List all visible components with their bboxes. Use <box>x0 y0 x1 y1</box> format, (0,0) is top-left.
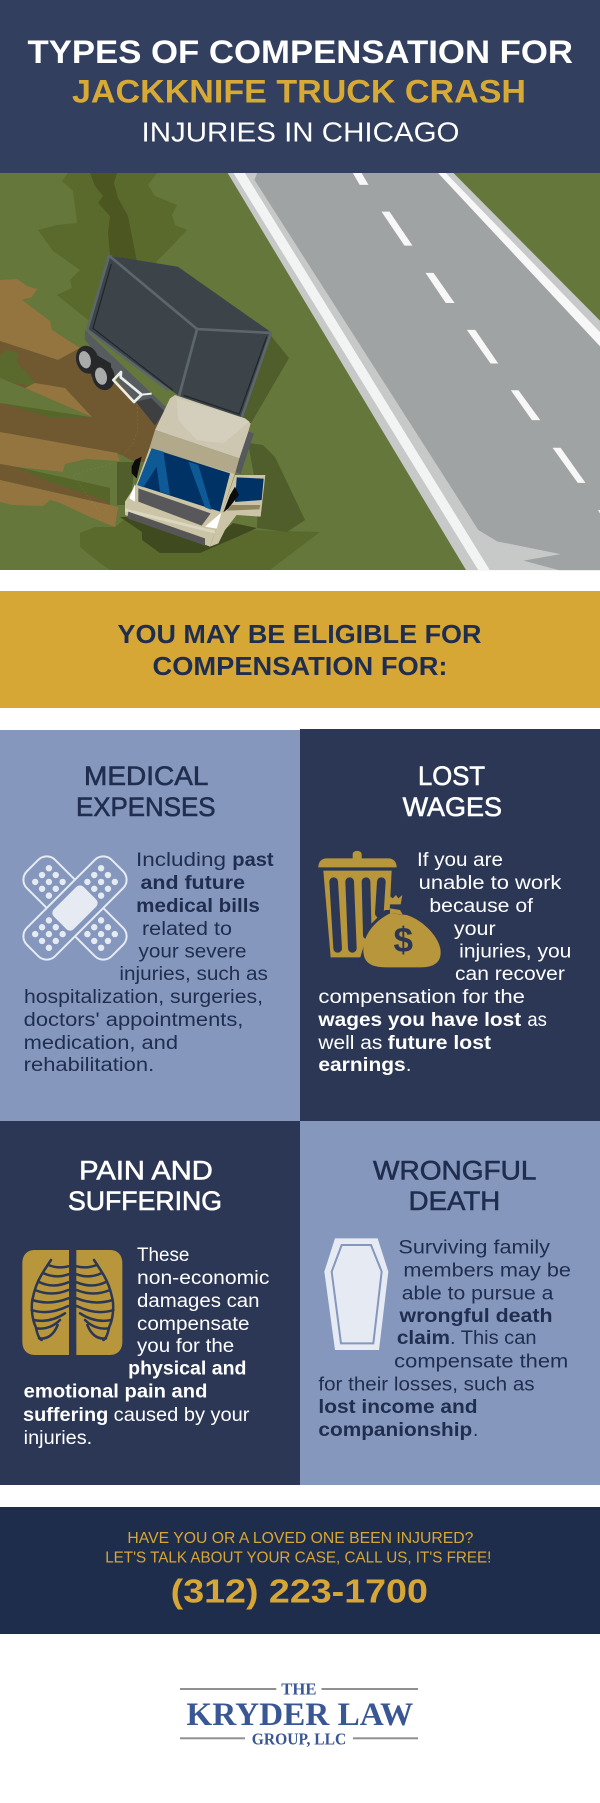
body text: pain and suffering: non-economic <box>137 1268 269 1289</box>
header panel <box>0 0 600 173</box>
heading: lost wages <box>403 761 502 822</box>
body text: medical expenses: your severe <box>138 942 246 962</box>
heading: pain and suffering: PAIN AND <box>79 1156 213 1186</box>
logo: The Kryder Law Group, LLC: GROUP, LLC <box>252 1729 346 1748</box>
body text: lost wages: If you are <box>417 850 503 871</box>
ground and mud tracks <box>0 173 320 570</box>
body text: pain and suffering: you for the <box>137 1336 234 1357</box>
body text: medical expenses: and future <box>140 873 245 894</box>
body text: wrongful death: for their losses, such as <box>318 1374 535 1395</box>
heading: lost wages: WAGES <box>403 792 502 822</box>
icon: trash can with money bag: $ <box>394 921 413 960</box>
body text: pain and suffering: emotional pain and <box>24 1382 207 1403</box>
body text: wrongful death: companionship <box>318 1420 472 1441</box>
call to action text <box>105 1530 491 1566</box>
body text: lost wages: earnings <box>318 1055 406 1076</box>
body text: lost wages: compensation for the <box>318 987 525 1008</box>
body text: pain and suffering: damages can <box>137 1291 260 1312</box>
banner heading <box>118 619 482 681</box>
panel: medical expenses <box>0 730 300 1121</box>
icon: coffin <box>324 1238 388 1350</box>
body text: medical expenses: medical bills <box>136 896 260 917</box>
body text: lost wages: your <box>454 919 496 940</box>
body text: wrongful death: compensate them <box>394 1351 568 1372</box>
body text: medical expenses: rehabilitation. <box>24 1055 154 1076</box>
body text: wrongful death: claim <box>397 1328 450 1349</box>
panel: pain and suffering <box>0 1121 300 1485</box>
logo: The Kryder Law Group, LLC <box>180 1680 418 1748</box>
heading: medical expenses: EXPENSES <box>76 792 216 822</box>
panel: lost wages <box>300 729 600 1121</box>
heading: pain and suffering <box>68 1156 222 1216</box>
body text: wrongful death: . <box>473 1420 478 1441</box>
body text: pain and suffering: caused by your <box>114 1405 250 1426</box>
icon: crossed bandages <box>18 851 132 965</box>
body text: wrongful death: lost income and <box>318 1397 478 1418</box>
body text: pain and suffering: compensate <box>137 1314 250 1335</box>
title: JACKKNIFE TRUCK CRASH <box>72 74 526 110</box>
body text: pain and suffering: physical and <box>128 1359 246 1380</box>
body text: lost wages: well as <box>317 1033 382 1054</box>
body text: wrongful death: Surviving family <box>398 1237 551 1258</box>
heading: wrongful death <box>373 1156 536 1216</box>
heading: medical expenses <box>76 761 216 822</box>
heading: wrongful death: DEATH <box>409 1186 500 1216</box>
body text: medical expenses: Including <box>136 850 226 871</box>
body text: lost wages: as <box>527 1010 547 1031</box>
body text: pain and suffering <box>23 1245 269 1449</box>
gold banner <box>0 591 600 708</box>
body text: pain and suffering: These <box>137 1245 189 1266</box>
wheels <box>73 343 118 393</box>
illustration: jackknifed truck beside road <box>0 173 600 570</box>
title <box>28 34 573 148</box>
body text: medical expenses: hospitalization, surgeries, <box>24 987 263 1008</box>
heading: medical expenses: MEDICAL <box>84 761 208 791</box>
truck trailer <box>73 256 271 426</box>
title: TYPES OF COMPENSATION FOR <box>28 34 573 70</box>
body text: lost wages <box>317 850 571 1076</box>
truck rear bracket <box>113 372 152 402</box>
body text: wrongful death: . This can <box>450 1328 536 1349</box>
body text: pain and suffering: injuries. <box>24 1428 92 1449</box>
body text: medical expenses: doctors' appointments, <box>24 1010 243 1031</box>
body text: lost wages: . <box>406 1055 411 1076</box>
banner heading: YOU MAY BE ELIGIBLE FOR <box>118 619 482 649</box>
heading: lost wages: LOST <box>418 761 485 791</box>
phone number: (312) 223-1700 <box>171 1573 428 1610</box>
icon: trash can with money bag <box>318 851 447 972</box>
body text: wrongful death: members may be <box>403 1260 571 1281</box>
body text: lost wages: injuries, you <box>459 942 571 962</box>
footer call to action <box>0 1507 600 1634</box>
body text: pain and suffering: suffering <box>23 1405 108 1426</box>
call to action text: HAVE YOU OR A LOVED ONE BEEN INJURED? <box>127 1530 473 1547</box>
body text: medical expenses: past <box>232 850 274 871</box>
logo: The Kryder Law Group, LLC: KRYDER LAW <box>186 1697 413 1733</box>
body text: lost wages: unable to work <box>419 873 562 894</box>
body text: lost wages: because of <box>429 896 534 917</box>
title: INJURIES IN CHICAGO <box>142 116 460 148</box>
body text: wrongful death <box>318 1237 571 1441</box>
body text: medical expenses: related to <box>142 919 232 940</box>
body text: medical expenses: medication, and <box>24 1033 178 1054</box>
body text: lost wages: future lost <box>388 1033 492 1054</box>
body text: medical expenses: injuries, such as <box>119 964 268 985</box>
road <box>228 173 600 570</box>
truck cab <box>125 395 265 547</box>
heading: pain and suffering: SUFFERING <box>68 1186 222 1216</box>
banner heading: COMPENSATION FOR: <box>152 651 448 681</box>
call to action text: LET'S TALK ABOUT YOUR CASE, CALL US, IT'S FREE! <box>105 1549 491 1566</box>
heading: wrongful death: WRONGFUL <box>373 1156 536 1186</box>
body text: wrongful death: wrongful death <box>398 1306 553 1327</box>
icon: rib cage <box>22 1250 122 1355</box>
body text: lost wages: wages you have lost <box>317 1010 522 1031</box>
panel: wrongful death <box>300 1121 600 1485</box>
body text: medical expenses <box>24 850 274 1076</box>
body text: wrongful death: able to pursue a <box>402 1283 554 1304</box>
body text: lost wages: can recover <box>455 964 566 985</box>
logo: The Kryder Law Group, LLC: THE <box>281 1680 316 1699</box>
